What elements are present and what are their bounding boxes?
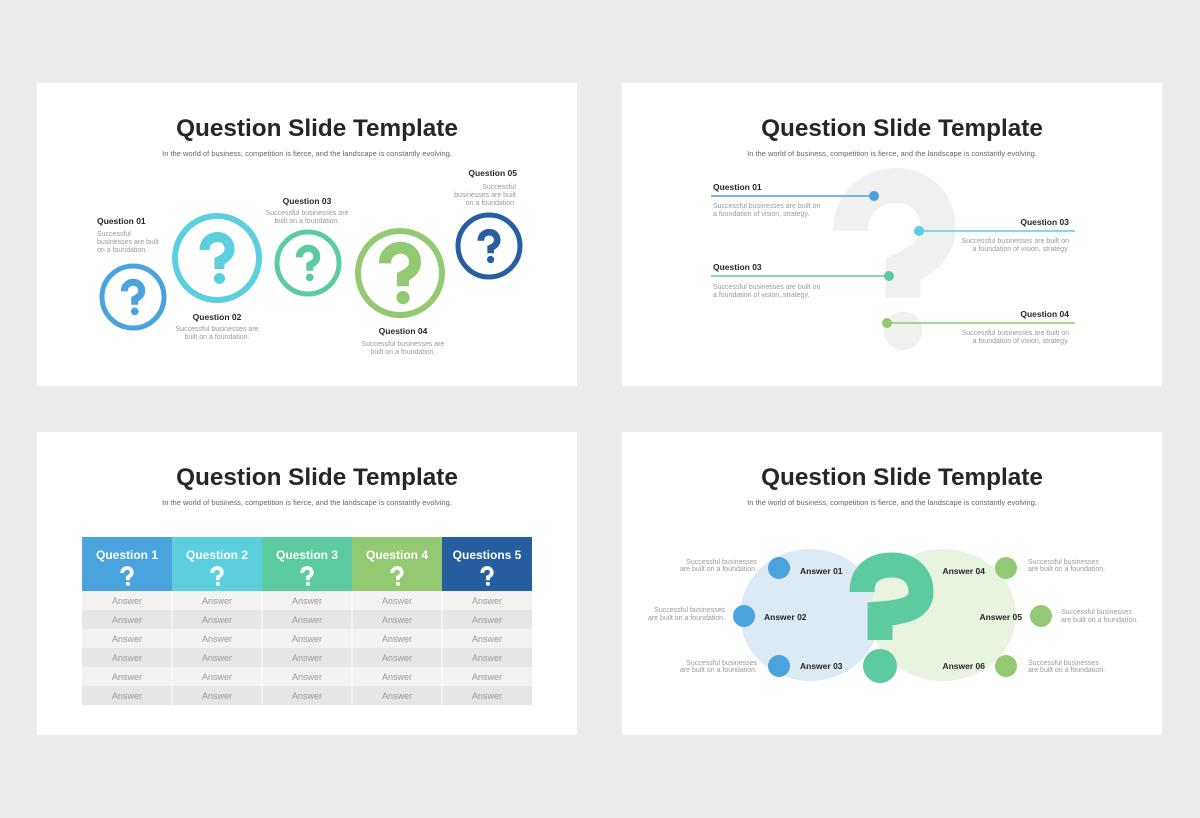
answers: left: are built on a foundation. — [680, 667, 757, 674]
table: Answer — [202, 596, 232, 606]
text: question 04: built on a foundation. — [370, 349, 436, 356]
text: question 04 — [362, 326, 445, 356]
table: Question 4 — [366, 548, 428, 562]
item: question 03 right: a foundation of vision, strategy. — [973, 246, 1069, 253]
panel: answers — [622, 432, 1162, 735]
text: question 05 — [454, 168, 517, 207]
table: Answer — [112, 634, 142, 644]
text: question 05: businesses are built — [454, 192, 516, 199]
text: question 01: businesses are built — [97, 239, 159, 246]
icon: circle 2 — [175, 216, 259, 300]
answers: left: are built on a foundation. — [680, 566, 757, 573]
table: Answer — [112, 691, 142, 701]
text: question 04: Successful businesses are — [362, 341, 445, 348]
answers: right: are built on a foundation. — [1028, 566, 1105, 573]
table: Answer — [202, 691, 232, 701]
ellipse: green — [870, 549, 1016, 681]
answers: left: Successful businesses — [654, 607, 725, 614]
answers: left: Successful businesses — [686, 660, 757, 667]
text: question 02: Question 02 — [193, 312, 242, 322]
table: Answer — [472, 672, 502, 682]
text: question 04: Question 04 — [379, 326, 428, 336]
title: Question Slide Template — [176, 115, 458, 142]
subtitle: In the world of business, competition is fierce, and the landscape is constantly evolving. — [162, 498, 452, 507]
text: question 02: built on a foundation. — [184, 334, 250, 341]
table: Answer — [202, 653, 232, 663]
answers: right: Answer 05 — [979, 612, 1022, 622]
table: Answer — [472, 653, 502, 663]
item: question 01: Successful businesses are built on — [713, 203, 820, 210]
table: Answer — [292, 672, 322, 682]
icon: big gray question mark — [850, 186, 938, 350]
answers: right: are built on a foundation. — [1061, 617, 1138, 624]
text: question 01: on a foundation. — [97, 247, 147, 254]
text: question 03: Successful businesses are — [266, 210, 349, 217]
table: Answer — [382, 653, 412, 663]
subtitle: In the world of business, competition is fierce, and the landscape is constantly evolving. — [162, 149, 452, 158]
table — [82, 537, 532, 705]
table: Questions 5 — [453, 548, 522, 562]
text: question 05: Question 05 — [468, 168, 517, 178]
answers: right: Answer 04 — [942, 566, 985, 576]
item: question 01: a foundation of vision, strategy. — [713, 211, 809, 218]
text: question 03: Question 03 — [283, 196, 332, 206]
table: Answer — [472, 596, 502, 606]
subtitle: In the world of business, competition is fierce, and the landscape is constantly evolving. — [747, 498, 1037, 507]
icon: circle 4 — [358, 231, 442, 315]
answers: right: Successful businesses — [1061, 609, 1132, 616]
item: question 03 right: Successful businesses are built on — [962, 238, 1069, 245]
item: question 04 — [882, 309, 1075, 345]
title: Question Slide Template — [761, 464, 1043, 491]
icon: green question mark — [862, 565, 921, 683]
table: Answer — [112, 596, 142, 606]
table: Answer — [202, 615, 232, 625]
table: Question 3 — [276, 548, 338, 562]
text: question 02 — [176, 312, 259, 341]
table: Answer — [292, 615, 322, 625]
table: Answer — [292, 634, 322, 644]
answers: left — [648, 557, 843, 677]
item: question 04: a foundation of vision, strategy. — [973, 338, 1069, 345]
table: Answer — [382, 634, 412, 644]
icon: circle 1 — [102, 266, 164, 328]
table: Answer — [382, 691, 412, 701]
item: question 04: Successful businesses are built on — [962, 330, 1069, 337]
table: Answer — [292, 596, 322, 606]
table: Answer — [112, 672, 142, 682]
text: question 03 — [266, 196, 349, 225]
title: Question Slide Template — [761, 115, 1043, 142]
text: question 01: Successful — [97, 231, 131, 238]
subtitle: In the world of business, competition is fierce, and the landscape is constantly evolving. — [747, 149, 1037, 158]
table: Answer — [472, 634, 502, 644]
text: question 05: on a foundation. — [466, 200, 516, 207]
text: question 03: built on a foundation. — [274, 218, 340, 225]
answers: right: are built on a foundation. — [1028, 667, 1105, 674]
ellipse: blue — [740, 549, 880, 681]
table: Answer — [472, 691, 502, 701]
table: Question 2 — [186, 548, 248, 562]
text: question 02: Successful businesses are — [176, 326, 259, 333]
panel: circles — [37, 83, 577, 386]
item: question 03 left: Successful businesses are built on — [713, 284, 820, 291]
answers: left: Answer 03 — [800, 661, 843, 671]
table: Answer — [112, 615, 142, 625]
icon: circle 5 — [458, 215, 520, 277]
table: Answer — [382, 596, 412, 606]
item: question 03 right: Question 03 — [1020, 217, 1069, 227]
item: question 04: Question 04 — [1020, 309, 1069, 319]
answers: right: Answer 06 — [942, 661, 985, 671]
text: question 01 — [97, 216, 159, 254]
text: question 01: Question 01 — [97, 216, 146, 226]
panel: table — [37, 432, 577, 735]
table: Answer — [202, 672, 232, 682]
table: Answer — [202, 634, 232, 644]
item: question 03 left: a foundation of vision, strategy. — [713, 292, 809, 299]
table: Answer — [292, 653, 322, 663]
table: Question 1 — [96, 548, 158, 562]
item: question 01: Question 01 — [713, 182, 762, 192]
item: question 03 left: Question 03 — [713, 262, 762, 272]
answers: left: are built on a foundation. — [648, 615, 725, 622]
answers: left: Answer 02 — [764, 612, 807, 622]
text: question 05: Successful — [482, 184, 516, 191]
answers: left: Answer 01 — [800, 566, 843, 576]
answers: right — [942, 557, 1138, 677]
table: Answer — [382, 672, 412, 682]
title: Question Slide Template — [176, 464, 458, 491]
item: question 03 right — [914, 217, 1075, 253]
table: Answer — [112, 653, 142, 663]
table: Answer — [292, 691, 322, 701]
answers: left: Successful businesses — [686, 559, 757, 566]
panel: lines — [622, 83, 1162, 386]
answers: right: Successful businesses — [1028, 559, 1099, 566]
answers: right: Successful businesses — [1028, 660, 1099, 667]
item: question 01 — [711, 182, 879, 218]
item: question 03 left — [711, 262, 894, 299]
table: Answer — [472, 615, 502, 625]
icon: circle 3 — [277, 232, 339, 294]
table: Answer — [382, 615, 412, 625]
